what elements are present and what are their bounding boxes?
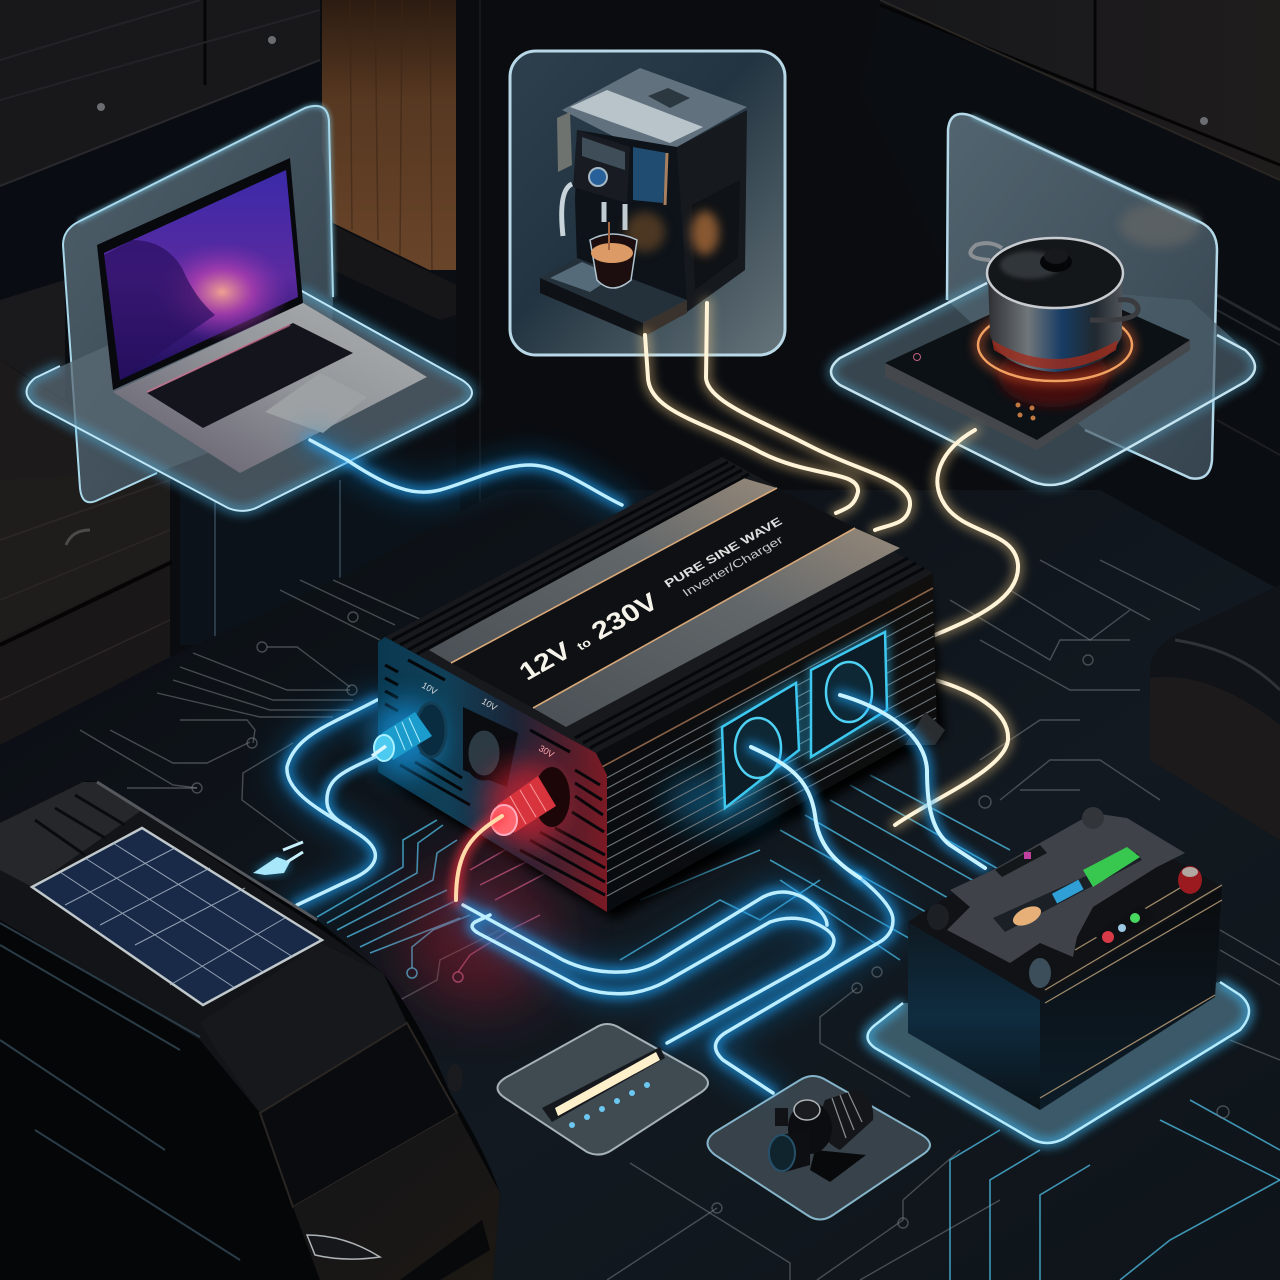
solar panel: [32, 828, 322, 1005]
van side highlight: [0, 923, 240, 1260]
machine nozzles: [604, 202, 625, 230]
van cab roof: [200, 943, 407, 1113]
dark column and counter: [180, 0, 520, 645]
machine drip tray: [540, 258, 687, 323]
blue readout: [1052, 880, 1084, 903]
van mirror: [447, 1064, 463, 1092]
panel: cooktop glass backdrop: [947, 114, 1217, 479]
pot body: [988, 278, 1122, 372]
battery top: [908, 813, 1222, 1000]
terminal labels: 10V: [420, 680, 439, 697]
seat on the right: [1150, 585, 1280, 840]
machine cup warmer: [570, 90, 703, 143]
van roof rear section: [0, 782, 142, 887]
battery indicator strip: [993, 853, 1142, 932]
wires: socket wires over inverter: [751, 695, 985, 878]
pump motor: [818, 1090, 873, 1150]
right socket: [811, 632, 887, 757]
machine side: [677, 110, 747, 312]
inverter foot: [905, 712, 945, 745]
side blue glow: [665, 770, 775, 830]
text: 12V to 230V: 12V to 230V: [513, 587, 664, 685]
top face fins: [392, 462, 924, 748]
pump volute: [788, 1102, 832, 1154]
touch bar glow: [147, 325, 290, 392]
terminal labels: [420, 680, 556, 760]
laptop keyboard: [147, 323, 353, 428]
green battery gauge: [1083, 847, 1140, 887]
label band: [451, 488, 855, 708]
laptop trackpad: [265, 373, 367, 433]
machine front: [575, 130, 687, 320]
van windshield: [260, 1023, 457, 1207]
wood panel: [322, 0, 456, 283]
panel: coffee machine glass: [510, 51, 785, 355]
left socket: [722, 683, 799, 808]
upper left cabinets: [0, 0, 322, 400]
machine control panel: [573, 130, 630, 203]
wire glow: [645, 303, 1018, 825]
heat ring: [978, 309, 1132, 381]
laptop base: [113, 303, 427, 473]
battery terminals: [927, 807, 1202, 988]
text: PURE SINE WAVE: PURE SINE WAVE: [662, 515, 785, 590]
panel: battery glass platform: [868, 982, 1249, 1143]
floor: [0, 490, 1280, 1280]
amber readout: [1010, 902, 1044, 930]
wire cores: [645, 303, 1018, 825]
panel: water pump module: [708, 1076, 930, 1220]
van grille: [400, 1220, 490, 1280]
wires: blue lines: [287, 440, 893, 1093]
van roof ridges: [35, 795, 125, 855]
van headlight: [307, 1235, 380, 1259]
pot knob: [1040, 252, 1072, 272]
upper grey band: [429, 477, 777, 663]
icon: laptop: [97, 158, 427, 473]
terminal labels: 30V: [537, 743, 556, 760]
blue terminal: [371, 702, 446, 774]
panel: LED light module: [498, 1024, 708, 1155]
small fuse strip: [995, 845, 1047, 877]
panel: laptop glass platform: [26, 290, 472, 511]
wires: cream power lines: [645, 303, 1018, 825]
battery right face: [1040, 887, 1222, 1110]
roof edge highlight: [97, 782, 317, 920]
icon: plug: [253, 842, 303, 875]
lower grey band: [533, 528, 900, 727]
machine steam wand: [562, 184, 572, 236]
heat zone: [998, 343, 1108, 407]
battery lid: [947, 813, 1185, 963]
upper right cabinets: [860, 0, 1280, 600]
van body: [0, 781, 500, 1280]
LED bar: [542, 1047, 665, 1122]
inverter top face: [385, 457, 933, 753]
inverter side face: [596, 573, 937, 912]
panel: cooktop glass platform: [831, 283, 1255, 485]
machine left trim: [557, 112, 572, 172]
laptop screen: [97, 158, 303, 390]
panel: laptop glass backdrop: [63, 106, 333, 502]
machine top: [562, 68, 747, 150]
battery edge lines: [1040, 885, 1222, 1098]
van roof: [0, 782, 383, 1113]
inverter shadow: [375, 590, 945, 920]
center port: [463, 707, 518, 787]
front vents: [385, 660, 605, 895]
icon: induction cooktop with pot: [885, 238, 1190, 450]
floor circuit traces: [80, 560, 1280, 1280]
battery left face: [908, 922, 1040, 1110]
pump foot: [810, 1150, 866, 1182]
van: [0, 781, 500, 1280]
loop glow: [287, 440, 893, 1093]
text: Inverter/Charger: Inverter/Charger: [680, 533, 786, 599]
wide floor glow: [287, 440, 893, 1093]
pump inlet: [780, 1130, 810, 1172]
red floor glow: [405, 865, 555, 1005]
red wire: [456, 816, 502, 900]
pot red base glow: [992, 340, 1118, 369]
blue LED reflections: [569, 1082, 650, 1128]
cooktop controls: [914, 354, 1036, 420]
side fins: [600, 588, 936, 896]
icon: coffee machine: [540, 68, 747, 337]
machine hopper lid: [648, 88, 690, 108]
terminal labels: 10V: [480, 696, 499, 713]
status lights: [1094, 905, 1155, 950]
van hood: [293, 1113, 500, 1280]
pot handles: [970, 243, 1002, 260]
lower left drawers: [0, 360, 172, 745]
cooktop: [885, 285, 1190, 450]
red terminal: [487, 763, 570, 847]
inverter: [371, 457, 945, 920]
pot lid: [987, 238, 1123, 308]
inverter label text: [513, 515, 786, 685]
inverter front face: [378, 637, 607, 912]
espresso cup: [590, 234, 637, 288]
machine blue tank: [633, 147, 667, 203]
icon: battery: [908, 807, 1222, 1110]
loop cores: [287, 440, 893, 1093]
